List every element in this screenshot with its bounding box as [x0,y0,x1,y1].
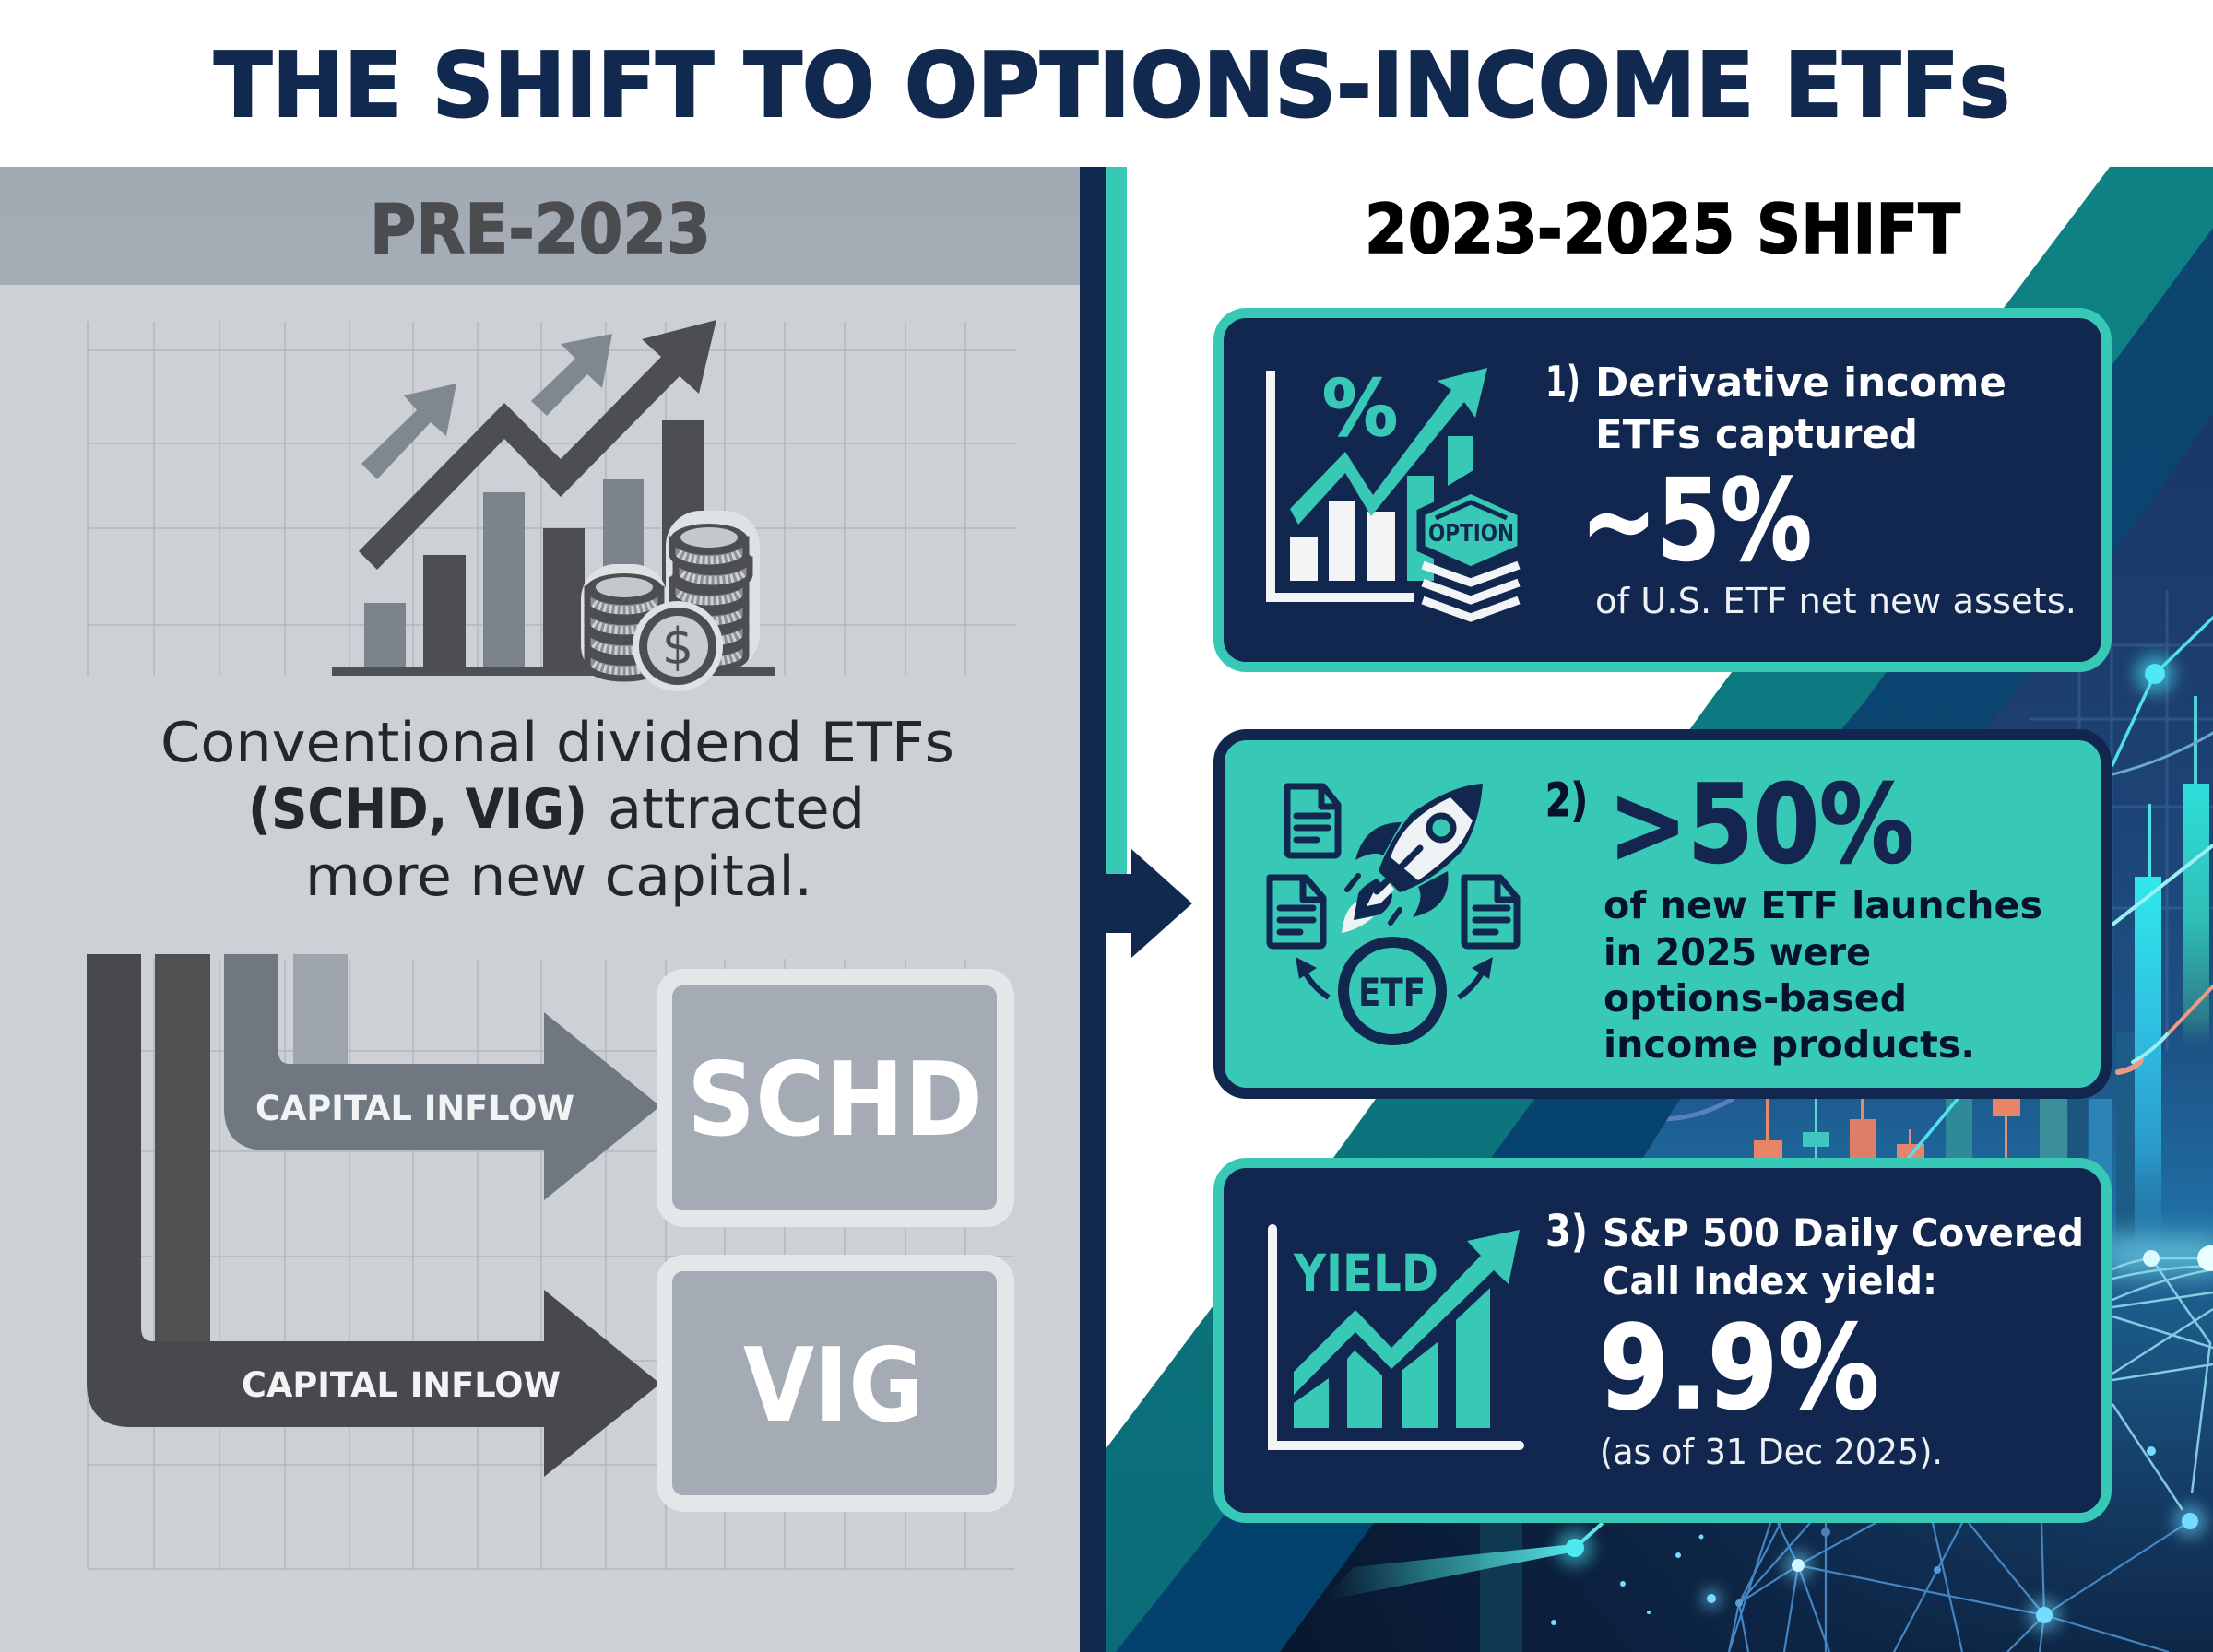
network glow [2102,1235,2213,1274]
icon: option chart: % [1322,363,1398,454]
card 1 text: Derivative income [1595,360,2006,407]
card 2 text: of new ETF launches [1604,883,2042,927]
icon: option chart [1271,363,1521,618]
main rising arrow [359,320,716,570]
text block: dividend ETFs: Conventional dividend ETFs [160,711,954,775]
candlestick columns [1754,696,2209,1265]
card 1 text: ~5% [1580,455,1812,586]
icon: dollar coin [633,601,723,691]
light beam and node [1339,1523,1604,1597]
icon: documents [1270,786,1517,946]
icon: rocket [1342,784,1483,933]
arrow: capital inflow to VIG: CAPITAL INFLOW [242,1365,561,1405]
arrow: capital inflow to VIG [87,954,660,1477]
icon: dollar coin: $ [662,618,693,676]
arrow: capital inflow to SCHD: CAPITAL INFLOW [255,1089,574,1128]
card 3 text [1545,1206,2084,1472]
card 1 text: ETFs captured [1595,411,1918,458]
card 2 text: options-based [1604,976,1907,1021]
card 1 text: 1) [1545,357,1580,407]
card 2 text: 2) [1545,773,1588,827]
text block: dividend ETFs: attracted [608,777,865,842]
chart trend lines [1665,618,2213,1159]
heading: 2023-2025 shift: 2023-2025 SHIFT [1365,190,1960,269]
icon: ETF circle with arrows [1296,942,1493,1040]
card 1: derivative income [1219,313,2106,667]
card 2 text: in 2025 were [1604,930,1871,974]
card 3 text: 3) [1545,1206,1588,1257]
card 2 text: income products. [1604,1022,1975,1067]
small gray arrows [361,334,612,479]
network lines [2112,1258,2213,1510]
icon: yield chart [1272,1229,1520,1446]
icon: ETF circle with arrows: ETF [1358,970,1426,1015]
box: VIG: VIG [743,1327,924,1446]
box: VIG [657,1255,1014,1512]
icon: yield chart: YIELD [1293,1244,1438,1303]
dark lower background [1280,1523,1959,1652]
card 2: new ETF launches [1219,735,2106,1093]
text block: dividend ETFs [160,711,954,909]
card 1 text: of U.S. ETF net new assets. [1595,581,2077,621]
card 3 text: 9.9% [1599,1300,1879,1435]
coin stacks [581,511,760,680]
heading: PRE-2023: PRE-2023 [370,190,711,269]
panel: pre-2023 [0,167,1080,1652]
glowing node [2135,654,2175,694]
icon: growth chart with coins [332,320,775,691]
panel header band [0,167,1080,285]
box: SCHD: SCHD [687,1041,983,1160]
card 3 text: (as of 31 Dec 2025). [1600,1432,1943,1472]
icon: option chart: OPTION [1428,520,1514,548]
lower network web [1729,1521,2190,1652]
arrow: capital inflow to SCHD [224,954,660,1200]
chart bars [332,420,775,676]
panel background: 2023-2025 diagonal bands [1106,167,2213,1652]
card 2 text [1545,761,2042,1067]
card 3 text: S&P 500 Daily Covered [1603,1210,2084,1256]
center divider: navy and teal strips [1080,167,1127,1652]
network nodes [1551,1245,2213,1632]
card 2 text: >50% [1608,761,1914,888]
box: SCHD [657,969,1014,1227]
arrow: center shift arrow [1106,849,1192,958]
card 3: covered call yield [1219,1163,2106,1517]
text block: dividend ETFs: more new capital. [305,844,812,909]
card 1 text [1545,357,2077,621]
title: THE SHIFT TO OPTIONS-INCOME ETFs [214,33,2010,137]
card 3 text: Call Index yield: [1603,1258,1937,1304]
text block: dividend ETFs: (SCHD, VIG) [248,777,587,842]
